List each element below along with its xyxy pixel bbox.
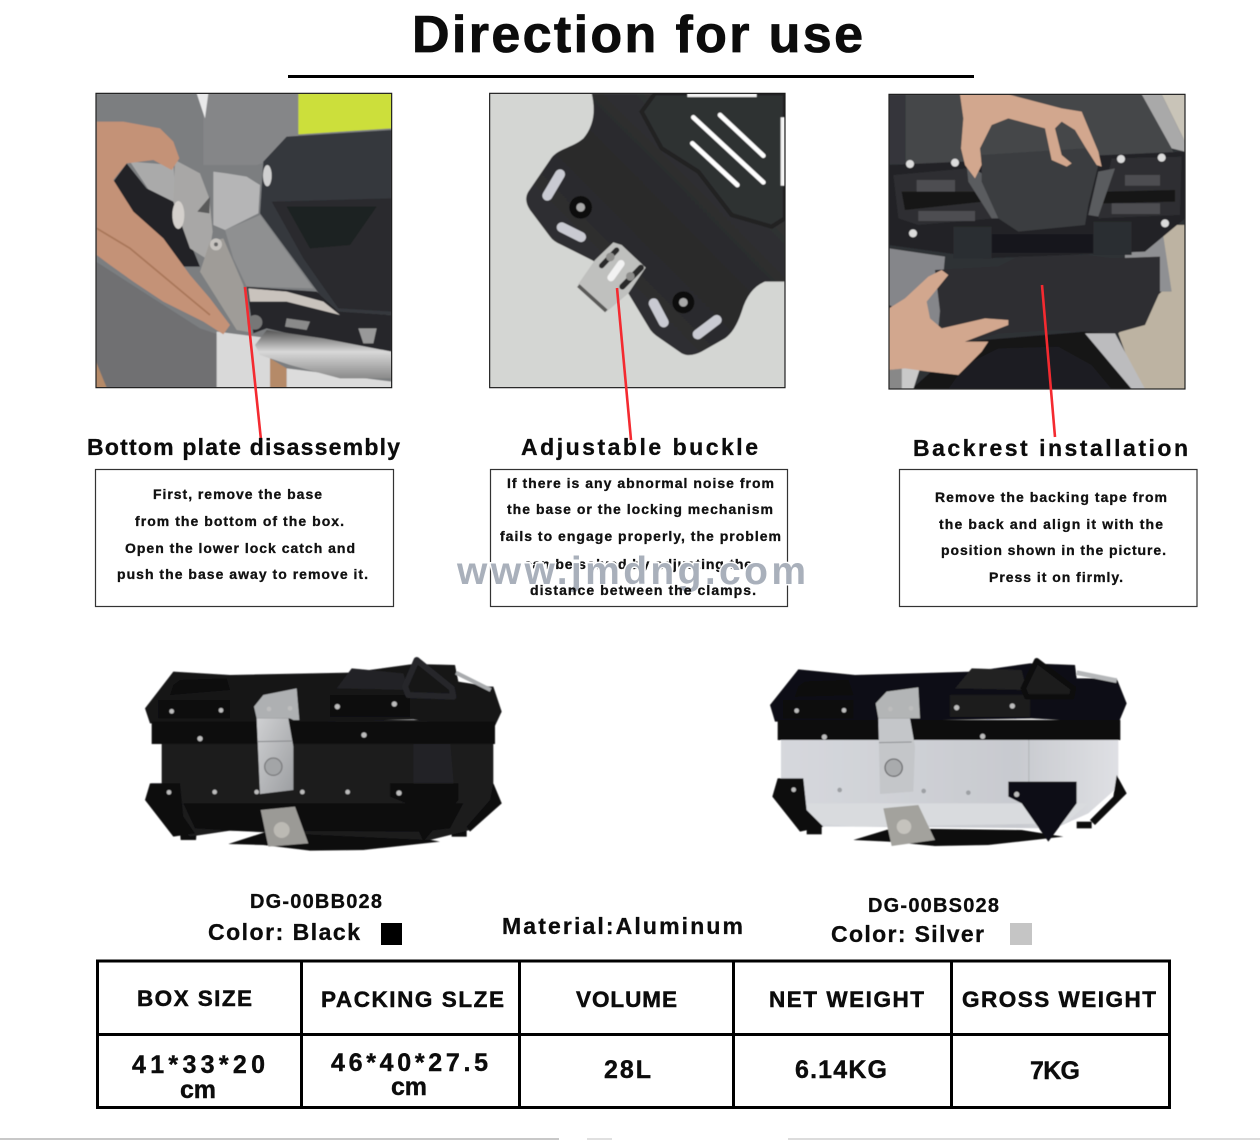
label: black model <box>208 891 402 945</box>
text box: can be solved by adjusting the <box>524 556 752 572</box>
heading: Adjustable buckle <box>521 434 758 460</box>
specification table: cm <box>180 1076 216 1104</box>
title: Direction for use <box>412 6 863 64</box>
text line above watermark: distance between the clamps. <box>530 582 756 598</box>
specification table: cm <box>391 1073 427 1101</box>
photo: hand removing base from box <box>96 93 392 388</box>
label: material: Material:Aluminum <box>502 913 743 939</box>
text box: the base or the locking mechanism <box>507 501 773 517</box>
specification table: 46*40*27.5 <box>331 1049 488 1077</box>
label: silver model: DG-00BS028 <box>868 895 999 917</box>
red pointer line <box>1042 285 1055 437</box>
text box: Remove the backing tape from <box>935 489 1167 505</box>
heading: Backrest installation <box>913 435 1188 461</box>
text box: push the base away to remove it. <box>117 566 368 582</box>
specification table: PACKING SLZE <box>321 987 504 1012</box>
text box: fails to engage properly, the problem <box>500 528 781 544</box>
specification table: 28L <box>604 1056 651 1084</box>
label: black model: DG-00BB028 <box>250 891 382 913</box>
text box <box>490 470 788 606</box>
specification table: GROSS WEIGHT <box>962 987 1156 1012</box>
text box: Open the lower lock catch and <box>125 540 355 556</box>
red pointer line <box>617 288 631 440</box>
text box <box>900 470 1197 606</box>
heading: Bottom plate disassembly <box>87 434 400 460</box>
label: silver model: Color: Silver <box>831 921 984 947</box>
text box: position shown in the picture. <box>941 542 1166 558</box>
text box: Press it on firmly. <box>989 569 1123 585</box>
watermark: www.jmdng.com <box>456 550 806 593</box>
photo: base plate with buckle <box>490 93 785 388</box>
specification table: 6.14KG <box>795 1056 887 1084</box>
text box: the back and align it with the <box>939 516 1163 532</box>
text box: from the bottom of the box. <box>135 513 344 529</box>
product image: silver box <box>770 661 1127 846</box>
product image: black box <box>145 660 502 851</box>
specification table: NET WEIGHT <box>769 987 924 1012</box>
label: black model: Color: Black <box>208 919 360 945</box>
text box <box>96 470 394 606</box>
panel: adjustable buckle <box>490 93 788 606</box>
specification table: 7KG <box>1030 1057 1080 1085</box>
specification table: 41*33*20 <box>132 1051 265 1079</box>
label: silver model <box>831 895 1032 947</box>
red pointer line <box>245 287 261 440</box>
text box: If there is any abnormal noise from <box>507 475 774 491</box>
specification table: BOX SIZE <box>137 986 252 1011</box>
photo: hands fitting backrest <box>889 94 1185 389</box>
text box: First, remove the base <box>153 486 322 502</box>
panel: bottom plate disassembly <box>87 93 400 606</box>
specification table <box>97 961 1170 1108</box>
panel: backrest installation <box>889 94 1197 606</box>
title underline <box>288 75 974 78</box>
specification table: VOLUME <box>576 987 677 1012</box>
